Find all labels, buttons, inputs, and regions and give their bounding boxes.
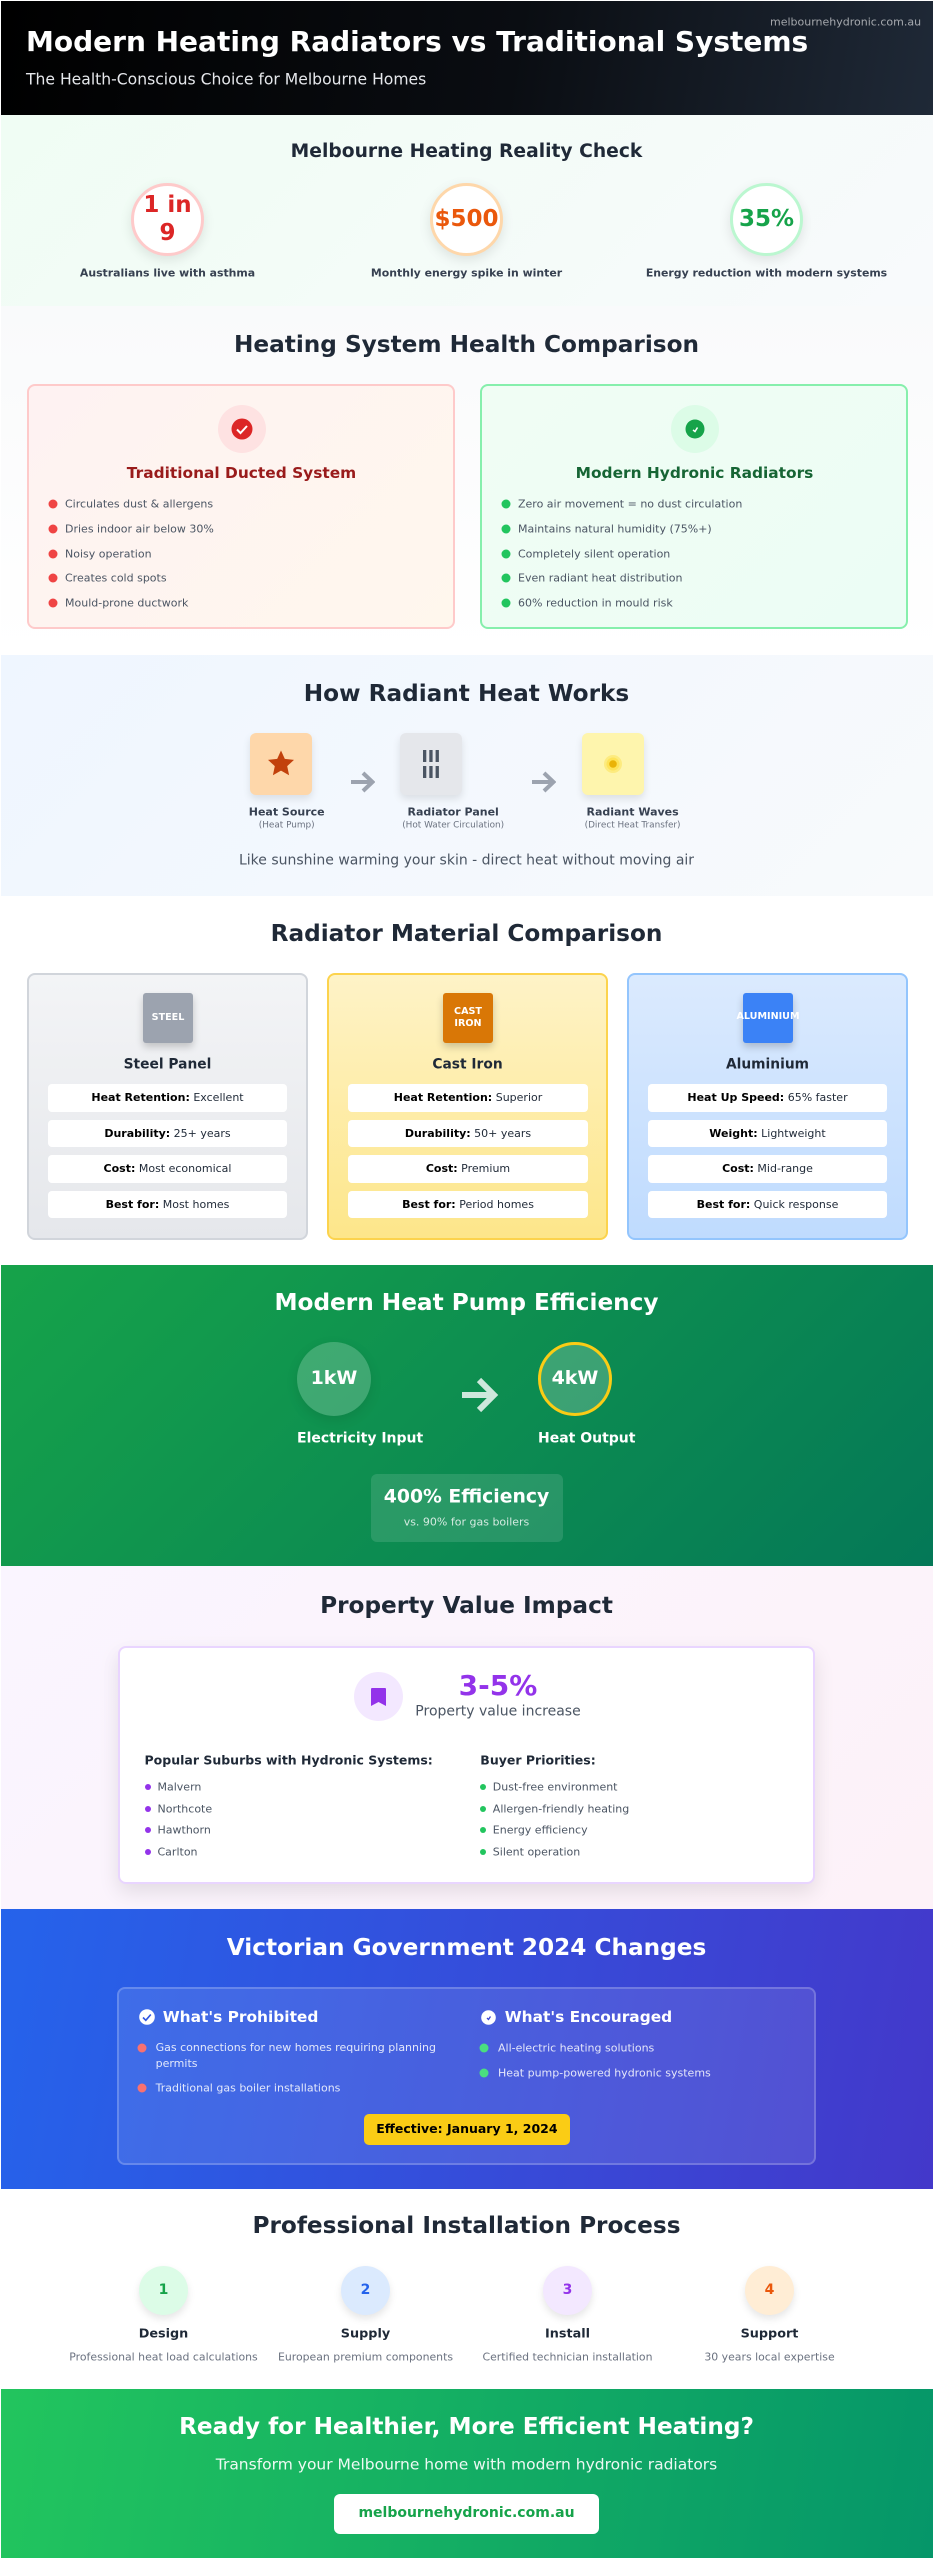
step: install: Certified technician installation (482, 2350, 652, 2363)
benefits list: Even radiant heat distribution (518, 571, 682, 584)
stat: energy spike: $500 (434, 206, 498, 232)
stat: energy reduction (730, 183, 803, 256)
output circle (538, 1342, 612, 1416)
panel: installation process (1, 2189, 932, 2389)
benefits list: Maintains natural humidity (75%+) (518, 522, 712, 535)
step: design: Design (139, 2326, 188, 2341)
suburbs list: Carlton (158, 1845, 198, 1858)
arrow (532, 772, 556, 792)
website button: melbournehydronic.com.au (358, 2505, 575, 2521)
step: support: Support (741, 2326, 798, 2341)
input circle (297, 1342, 371, 1416)
card: modern hydronic (480, 384, 908, 629)
label: radiant waves: Radiant Waves (586, 805, 679, 818)
efficiency callout (370, 1474, 562, 1542)
spec rows: Cost: Premium (426, 1162, 510, 1175)
step: supply (278, 2266, 453, 2363)
spec rows (348, 1084, 588, 1218)
icon: aluminium swatch: ALUMINIUM (736, 1011, 800, 1022)
risks list: Mould-prone ductwork (65, 596, 188, 609)
priorities list: Energy efficiency (493, 1823, 588, 1836)
output circle: 4kW (552, 1367, 598, 1389)
risks list: Dries indoor air below 30% (65, 522, 214, 535)
heading: Professional Installation Process (252, 2212, 681, 2239)
heading: Melbourne Heating Reality Check (291, 141, 642, 162)
stat label: Energy reduction with modern systems (646, 266, 887, 279)
heading: Ready for Healthier, More Efficient Heating? (179, 2413, 754, 2440)
label: heat source: (Heat Pump) (259, 820, 315, 830)
spec rows: Best for: Quick response (697, 1198, 838, 1210)
step: design (69, 2266, 258, 2363)
icon: check badge (670, 405, 718, 453)
priorities list: Dust-free environment (493, 1780, 618, 1793)
suburbs list: Malvern (158, 1780, 201, 1793)
heading: Victorian Government 2024 Changes (227, 1934, 706, 1961)
rules panel (117, 1987, 816, 2165)
label: radiator panel: Radiator Panel (408, 805, 499, 818)
prohibited items: Gas connections for new homes requiring planning permits (156, 2041, 436, 2070)
card: traditional ducted (27, 384, 455, 629)
spec rows: Cost: Most economical (104, 1162, 231, 1175)
spec rows: Heat Up Speed: 65% faster (687, 1091, 848, 1104)
priorities list (480, 1752, 629, 1858)
label: heat source: Heat Source (249, 805, 325, 818)
step: install (482, 2266, 652, 2363)
value figure: 3-5% (459, 1669, 537, 1702)
step: design: Professional heat load calculations (69, 2350, 258, 2363)
label: radiator panel: (Hot Water Circulation) (402, 820, 504, 830)
stat label: Australians live with asthma (80, 266, 255, 279)
heading: Heating System Health Comparison (234, 331, 699, 358)
prohibited heading: What's Prohibited (163, 2008, 318, 2026)
benefits list: Completely silent operation (518, 547, 670, 560)
risks list: Circulates dust & allergens (65, 497, 213, 510)
benefits list (502, 497, 742, 609)
title: Modern Heating Radiators vs Traditional Systems (26, 25, 808, 58)
step: support: 30 years local expertise (704, 2350, 835, 2363)
icon: cast iron swatch: CAST (454, 1006, 482, 1016)
input circle: 1kW (311, 1367, 357, 1389)
icon: steel swatch: STEEL (152, 1012, 184, 1023)
label: output: Heat Output (538, 1431, 635, 1447)
step: support (704, 2266, 835, 2363)
label: radiant waves (585, 805, 681, 830)
spec rows: Best for: Most homes (106, 1198, 229, 1210)
material name: Aluminium (726, 1057, 809, 1073)
label: input: Electricity Input (297, 1431, 423, 1447)
stat: asthma: 1 in 9 (143, 192, 192, 246)
website button (334, 2494, 599, 2534)
icon: check (139, 2009, 155, 2025)
analogy caption: Like sunshine warming your skin - direct heat without moving air (239, 853, 694, 869)
panel: material comparison (1, 896, 932, 1265)
icon: check (481, 2010, 496, 2025)
icon: steel swatch (143, 993, 193, 1043)
list heading: Buyer Priorities: (480, 1752, 596, 1768)
card: aluminium (627, 973, 908, 1240)
card title: Traditional Ducted System (127, 464, 356, 482)
icon: check badge (218, 405, 266, 453)
material name: Steel Panel (124, 1057, 211, 1073)
material name: Cast Iron (432, 1057, 503, 1073)
priorities list: Allergen-friendly heating (493, 1802, 629, 1815)
panel: reality check (1, 115, 932, 306)
efficiency figure: 400% Efficiency (384, 1487, 549, 1508)
icon: cast iron swatch: IRON (454, 1018, 482, 1029)
list heading: Popular Suburbs with Hydronic Systems: (144, 1752, 433, 1768)
panel: health comparison (1, 306, 932, 655)
efficiency note: vs. 90% for gas boilers (404, 1515, 529, 1528)
stat: energy reduction: 35% (739, 206, 794, 232)
suburbs list: Northcote (158, 1802, 212, 1815)
icon: radiator panel (400, 733, 462, 795)
step: design: 1 (159, 2282, 168, 2298)
step: supply: Supply (341, 2326, 390, 2341)
subtitle: The Health-Conscious Choice for Melbourne Homes (26, 71, 426, 89)
panel: how radiant heat works (1, 655, 932, 896)
stat: energy spike (430, 183, 503, 256)
icon: radiant waves (582, 733, 644, 795)
label: radiant waves: (Direct Heat Transfer) (585, 820, 681, 830)
website watermark: melbournehydronic.com.au (770, 15, 921, 28)
icon: cast iron swatch (443, 993, 493, 1043)
heading: Property Value Impact (320, 1592, 613, 1619)
heading: How Radiant Heat Works (304, 680, 629, 707)
stat: asthma (131, 183, 204, 256)
heading: Radiator Material Comparison (271, 920, 662, 947)
spec rows: Durability: 25+ years (104, 1126, 231, 1140)
suburbs list (144, 1752, 433, 1858)
arrow (462, 1378, 498, 1412)
card title: Modern Hydronic Radiators (576, 464, 813, 482)
prohibited items: Traditional gas boiler installations (156, 2081, 340, 2094)
value label: Property value increase (415, 1704, 581, 1720)
card: cast iron (327, 973, 608, 1240)
arrow (351, 772, 375, 792)
step: install: 3 (563, 2282, 572, 2298)
spec rows: Cost: Mid-range (722, 1162, 813, 1175)
spec rows: Heat Retention: Excellent (91, 1091, 244, 1104)
encouraged heading: What's Encouraged (505, 2008, 672, 2026)
encouraged items (480, 2041, 711, 2079)
prohibited items (138, 2041, 436, 2094)
spec rows (648, 1084, 887, 1218)
panel: heat pump efficiency (1, 1265, 932, 1566)
benefits list: Zero air movement = no dust circulation (518, 497, 742, 510)
risks list (48, 497, 214, 609)
encouraged items: Heat pump-powered hydronic systems (498, 2066, 711, 2079)
risks list: Creates cold spots (65, 571, 167, 584)
spec rows: Weight: Lightweight (709, 1126, 826, 1140)
effective date badge (364, 2114, 570, 2145)
value card (118, 1646, 815, 1884)
icon: bookmark (354, 1672, 402, 1721)
step: supply: 2 (361, 2282, 370, 2298)
icon: heat source (250, 733, 312, 795)
card: steel (27, 973, 308, 1240)
panel: call to action (1, 2389, 932, 2558)
spec rows: Best for: Period homes (402, 1198, 534, 1210)
priorities list: Silent operation (493, 1845, 580, 1858)
header banner (1, 1, 932, 115)
heading: Modern Heat Pump Efficiency (274, 1289, 659, 1316)
subheading: Transform your Melbourne home with modern hydronic radiators (216, 2456, 717, 2474)
step: support: 4 (765, 2282, 774, 2298)
icon: aluminium swatch (743, 993, 793, 1043)
panel: property value (1, 1566, 932, 1909)
spec rows: Durability: 50+ years (405, 1126, 531, 1140)
label: radiator panel (402, 805, 504, 830)
suburbs list: Hawthorn (158, 1823, 211, 1836)
spec rows (48, 1084, 287, 1218)
panel: government changes (1, 1909, 932, 2189)
stat label: Monthly energy spike in winter (371, 266, 562, 279)
benefits list: 60% reduction in mould risk (518, 596, 673, 609)
step: install: Install (545, 2326, 590, 2341)
step: supply: European premium components (278, 2350, 453, 2363)
label: heat source (249, 805, 325, 830)
spec rows: Heat Retention: Superior (394, 1091, 542, 1104)
effective date badge: Effective: January 1, 2024 (376, 2121, 558, 2136)
encouraged items: All-electric heating solutions (498, 2041, 654, 2054)
risks list: Noisy operation (65, 547, 152, 560)
